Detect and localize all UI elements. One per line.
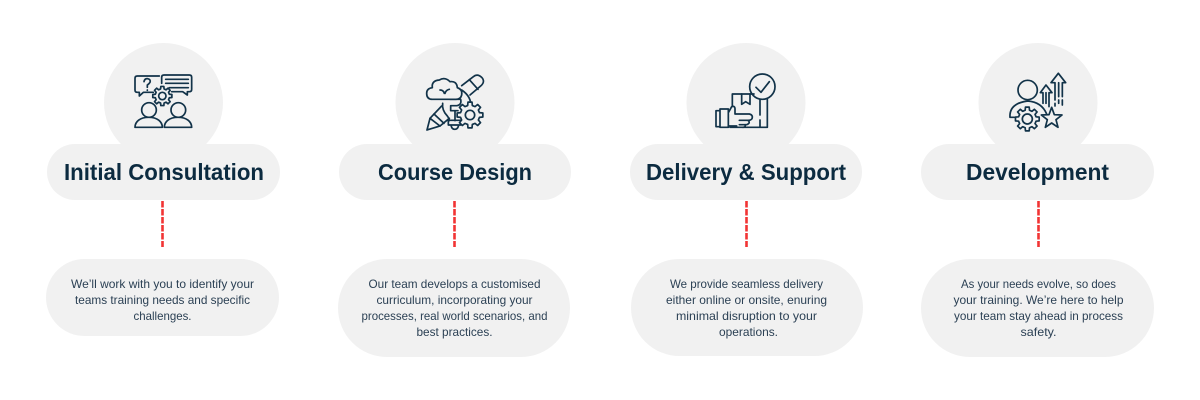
description pill: initial consultation: challenges.	[134, 309, 192, 323]
description pill: development: your training. We’re here to help	[954, 293, 1124, 307]
icon circle: delivery and support	[686, 43, 806, 162]
heading pill: course design	[339, 144, 571, 200]
heading pill: initial consultation	[47, 144, 280, 200]
description pill: delivery and support: minimal disruption to your	[676, 309, 817, 323]
icon: people discussing	[135, 75, 192, 127]
heading: course design: Course Design	[378, 159, 532, 185]
panel: delivery and support	[630, 43, 863, 356]
icon circle: course design	[396, 43, 514, 162]
description pill: course design: curriculum, incorporating your	[376, 293, 533, 307]
heading: initial consultation: Initial Consultation	[64, 159, 264, 185]
dashed connector	[453, 201, 456, 247]
icon circle: initial consultation	[104, 43, 223, 162]
heading pill: delivery and support	[630, 144, 862, 200]
panel: course design	[338, 43, 571, 357]
description pill: initial consultation	[46, 259, 279, 336]
dashed connector	[745, 201, 748, 247]
dashed connector	[1037, 201, 1040, 247]
description pill: initial consultation: We’ll work with you to identify your	[71, 277, 254, 291]
icon circle: development	[978, 43, 1098, 162]
heading: development: Development	[966, 159, 1109, 185]
heading: delivery and support: Delivery & Support	[646, 159, 846, 185]
description pill: development	[921, 259, 1154, 357]
description pill: delivery and support	[631, 259, 863, 356]
description pill: development: safety.	[1020, 325, 1056, 339]
description pill: initial consultation: teams training needs and specific	[75, 293, 250, 307]
description pill: development: your team stay ahead in process	[954, 309, 1123, 323]
description pill: development: As your needs evolve, so does	[961, 277, 1116, 291]
description pill: delivery and support: operations.	[719, 325, 778, 339]
description pill: delivery and support: either online or onsite, enuring	[666, 293, 827, 307]
icon: pencil, cloud, bulb and gear	[427, 75, 483, 130]
dashed connector	[161, 201, 164, 247]
description pill: course design: best practices.	[416, 325, 492, 339]
heading pill: development	[921, 144, 1154, 200]
description pill: course design	[338, 259, 570, 357]
panel: development	[921, 43, 1154, 357]
icon: person, gear, star and arrows	[1010, 73, 1066, 131]
icon: hand holding box with check	[716, 74, 775, 127]
description pill: course design: Our team develops a customised	[368, 277, 540, 291]
panel: initial consultation	[46, 43, 280, 336]
description pill: course design: processes, real world scenarios, and	[362, 309, 548, 323]
description pill: delivery and support: We provide seamless delivery	[670, 277, 823, 291]
